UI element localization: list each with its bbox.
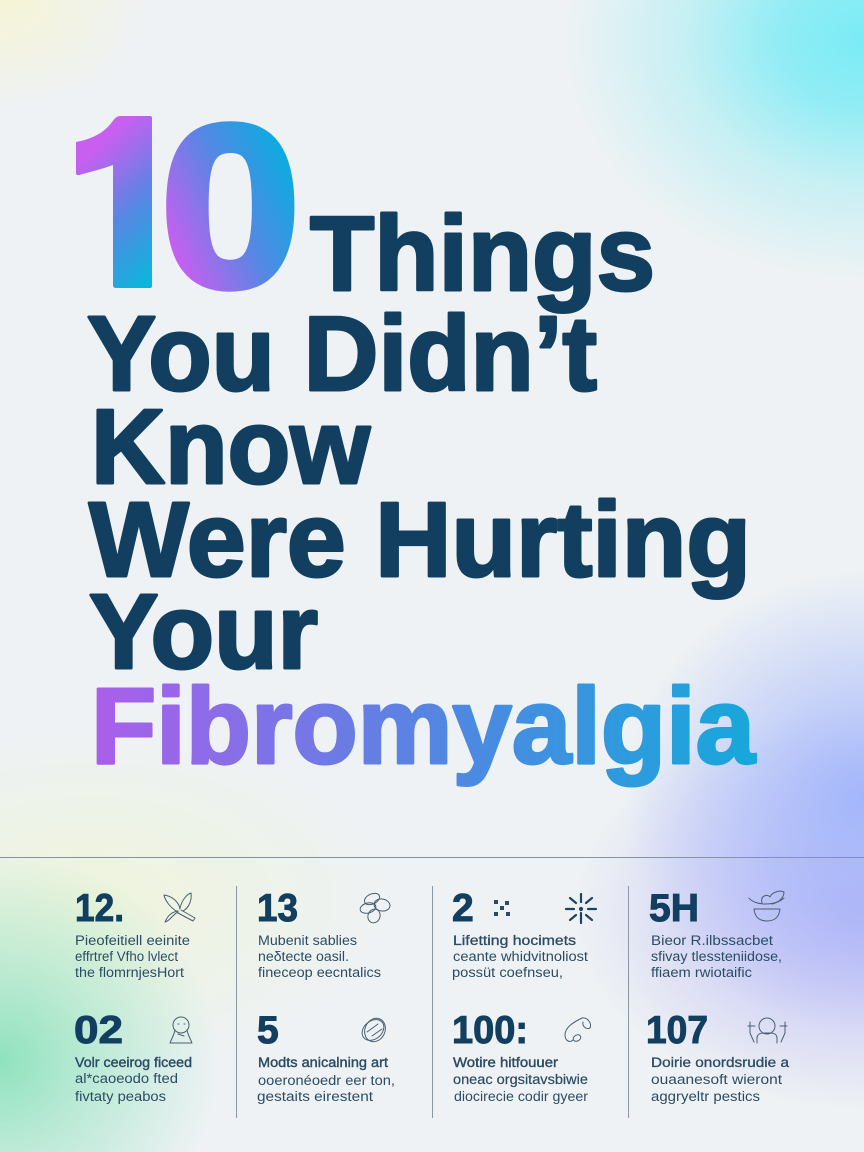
description: neδtecte oasil.: [258, 949, 349, 964]
title line: Fibromyalgia: Fibromyalgia: [91, 665, 756, 786]
description: Wotire hitfouuer: [453, 1055, 559, 1070]
description: Bieor R.ilbssacbet: [651, 933, 773, 948]
item: 13: 13: [257, 887, 298, 930]
dots: [494, 900, 510, 916]
description: possüt coefnseu,: [452, 965, 563, 980]
title: [60, 77, 756, 786]
description: ooeronéoedr eer ton,: [258, 1073, 395, 1088]
title line: Know: Know: [91, 388, 371, 506]
icon: bowl: [749, 891, 784, 921]
item: 12.: [75, 887, 195, 980]
description: Volr ceeirog ficeed: [75, 1055, 192, 1070]
description: fineceop eecntalics: [258, 965, 381, 980]
description: aggryeltr pestics: [651, 1089, 760, 1104]
icon: cells: [359, 891, 391, 925]
title line: Were Hurting: Were Hurting: [89, 481, 751, 599]
item: 100:: 100:: [452, 1009, 528, 1052]
title number 10: [76, 116, 294, 292]
title number 10: 0: [160, 77, 301, 335]
title line: Things: Things: [310, 195, 655, 313]
icon: person head: [170, 1017, 192, 1043]
description: sfivay tlessteniidose,: [651, 949, 782, 964]
horizontal divider: [0, 857, 864, 858]
title line: You Didn't: You Didn’t: [87, 295, 597, 413]
item: 02: [74, 1009, 192, 1104]
item: 5: 5: [257, 1009, 279, 1052]
item: 02: 02: [74, 1009, 123, 1052]
item: 5H: 5H: [649, 887, 699, 930]
item: 13: [257, 887, 391, 980]
item: 12.: 12.: [75, 887, 124, 930]
item: 107: 107: [646, 1009, 708, 1052]
description: Pieofeitiell eeinite: [75, 933, 190, 948]
description: [651, 1055, 790, 1104]
icon: curved organ outline: [565, 1018, 591, 1043]
description: diocirecie codir gyeer: [454, 1089, 589, 1104]
description: effrtref Vfho lvlect: [75, 949, 178, 964]
title line: Your: Your: [89, 573, 318, 691]
item: 2: [452, 887, 596, 980]
description: fivtaty peabos: [75, 1089, 166, 1104]
description: [257, 1055, 395, 1104]
description: [75, 1055, 192, 1104]
description: Doirie onordsrudie a: [651, 1055, 790, 1070]
description: [651, 933, 782, 980]
item: 5: [257, 1009, 395, 1104]
description: [452, 933, 588, 980]
title number 10: 1: [60, 77, 188, 335]
description: oneac orgsitavsbiwie: [453, 1072, 588, 1087]
icon: leaf sprig: [164, 893, 195, 922]
icon: person with arms: [748, 1018, 787, 1043]
description: the flomrnjesHort: [75, 965, 184, 980]
description: Modts anicalning art: [258, 1055, 388, 1070]
description: ffiaem rwiotaific: [651, 965, 752, 980]
description: Lifetting hocimets: [453, 933, 576, 948]
description: gestaits eirestent: [257, 1089, 373, 1104]
description: Mubenit sablies: [258, 933, 357, 948]
item: 2: 2: [452, 887, 474, 930]
description: [258, 933, 381, 980]
item: 100:: [452, 1009, 591, 1104]
description: ceante whidvitnoliost: [453, 949, 588, 964]
description: ouaanesoft wieront: [651, 1072, 782, 1087]
icon: sparkle burst: [566, 894, 596, 923]
description: [453, 1055, 589, 1104]
description: [75, 933, 190, 980]
item: 5H: [649, 887, 784, 980]
description: al*caoeodo fted: [75, 1071, 178, 1086]
item: 107: [646, 1009, 790, 1104]
icon: tangled knot: [358, 1015, 389, 1045]
